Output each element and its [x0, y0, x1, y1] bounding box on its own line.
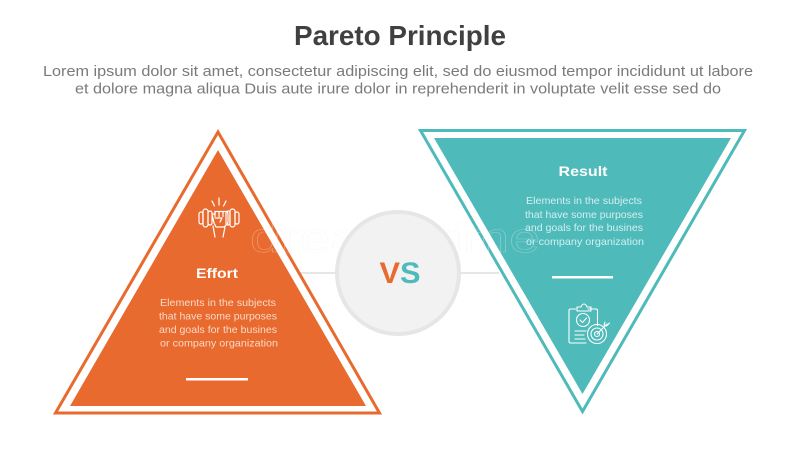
triangle outline: result: [420, 130, 744, 412]
body text: result: or company organization: [526, 236, 644, 248]
subtitle: [43, 64, 753, 98]
body text: effort: and goals for the busines: [159, 324, 277, 336]
divider: result: [552, 276, 613, 278]
icon: clipboard with target: [569, 304, 610, 344]
vs badge: [337, 212, 459, 334]
triangle outline: effort: [56, 132, 380, 413]
vs label: VS: [380, 257, 420, 290]
connector lines: [300, 272, 499, 274]
watermark: dreamstime: [250, 214, 540, 261]
panel: result triangle: [420, 130, 744, 412]
title: Pareto Principle: [294, 20, 506, 51]
body text: result: that have some purposes: [525, 209, 643, 221]
body text: result: and goals for the busines: [525, 222, 643, 234]
circle: [337, 212, 459, 334]
subtitle: et dolore magna aliqua Duis aute irure dolor in reprehenderit in voluptate velit esse sed do: [75, 82, 721, 98]
panel: effort triangle: [56, 132, 380, 413]
body text: effort: that have some purposes: [159, 310, 277, 322]
triangle fill: result: [434, 138, 731, 394]
body text: result: Elements in the subjects: [526, 195, 642, 207]
icon: fist with dumbbell: [199, 198, 239, 237]
body text: effort: [159, 297, 278, 350]
body text: effort: or company organization: [160, 338, 278, 350]
heading: result: Result: [558, 163, 608, 179]
subtitle: Lorem ipsum dolor sit amet, consectetur adipiscing elit, sed do eiusmod tempor incididunt ut labore: [43, 64, 753, 80]
heading: effort: Effort: [196, 265, 238, 281]
body text: effort: Elements in the subjects: [160, 297, 276, 309]
triangle fill: effort: [70, 150, 366, 406]
body text: result: [525, 195, 644, 248]
divider: effort: [186, 378, 248, 380]
